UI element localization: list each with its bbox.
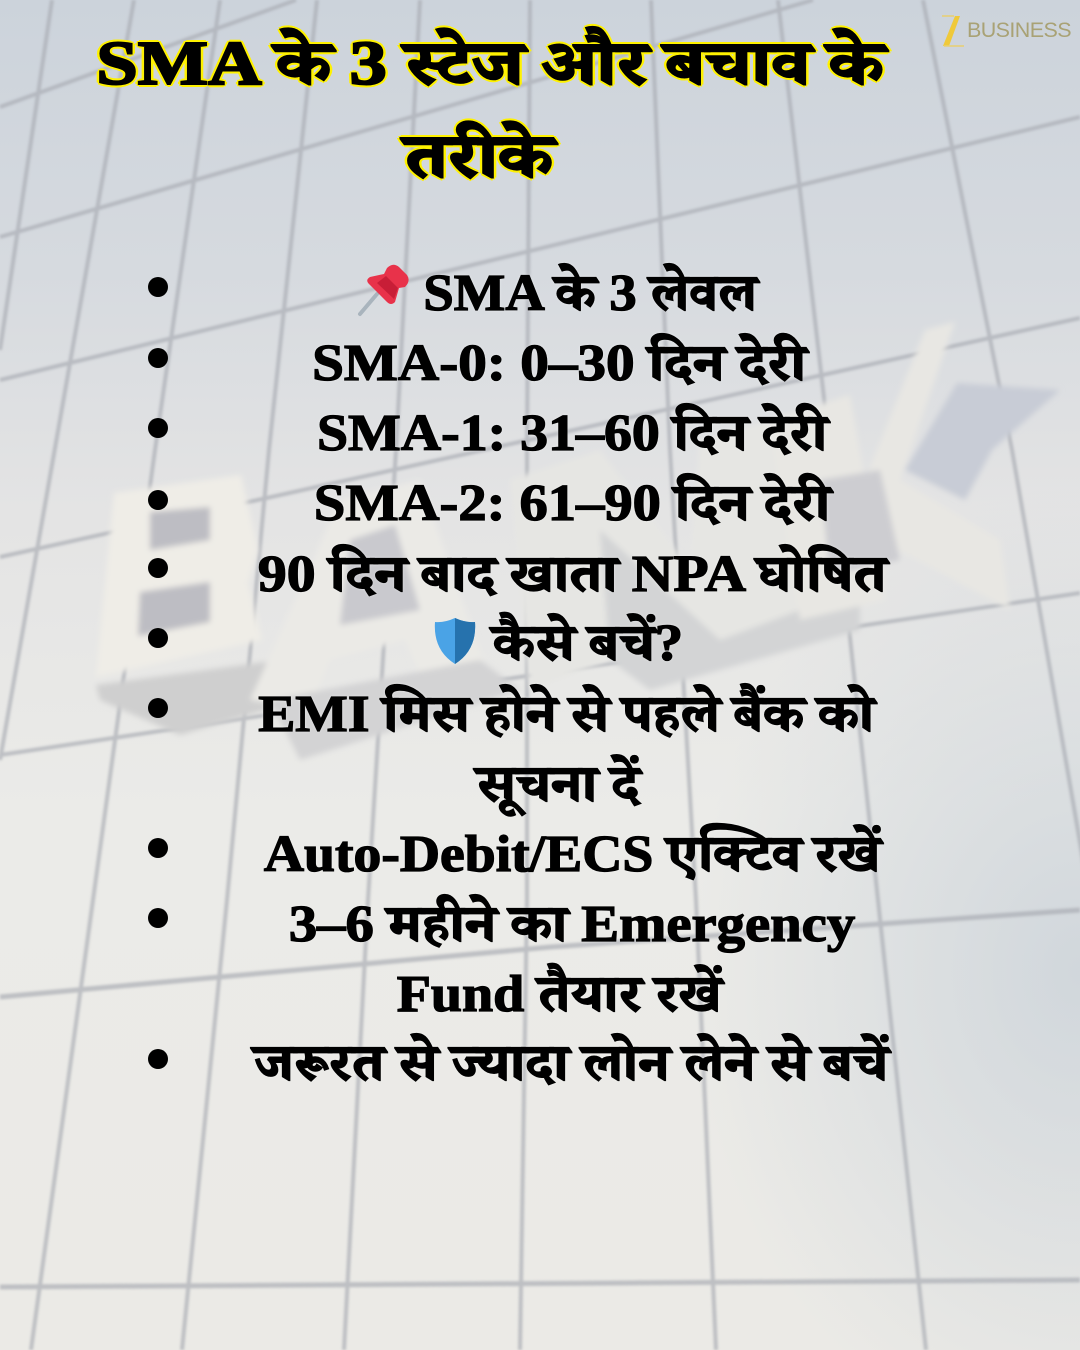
icon: pushpin <box>358 264 409 316</box>
bank lettering, blurred <box>96 322 1060 760</box>
logo: Z Business: BUSINESS <box>967 18 1071 42</box>
list item: inform bank, line 2: सूचना दें <box>477 756 639 813</box>
list item: SMA-2: SMA-2: 61–90 दिन देरी <box>314 475 830 532</box>
list item: inform bank, line 1: EMI मिस होने से पहले बैंक को <box>258 686 874 743</box>
list item: emergency fund, line 1: 3–6 महीने का Emergency <box>289 896 855 953</box>
logo: Z Business <box>942 15 1071 47</box>
list item: auto debit: Auto-Debit/ECS एक्टिव रखें <box>264 826 880 883</box>
list item: SMA-0: SMA-0: 0–30 दिन देरी <box>312 335 806 392</box>
icon: shield <box>434 618 476 664</box>
list heading: how to avoid: कैसे बचें? <box>493 615 683 672</box>
list item: SMA-1: SMA-1: 31–60 दिन देरी <box>317 405 827 462</box>
bullet list <box>148 262 892 1092</box>
title line 1: SMA के 3 स्टेज और बचाव के <box>96 30 884 98</box>
bullet dots <box>148 277 168 1069</box>
list item: avoid excess loans: जरूरत से ज्यादा लोन लेने से बचें <box>254 1035 888 1092</box>
list item: emergency fund, line 2: Fund तैयार रखें <box>397 966 721 1023</box>
list item: NPA: 90 दिन बाद खाता NPA घोषित <box>258 546 886 603</box>
list heading: SMA levels: SMA के 3 लेवल <box>423 265 757 322</box>
title line 2: तरीके <box>405 123 553 191</box>
